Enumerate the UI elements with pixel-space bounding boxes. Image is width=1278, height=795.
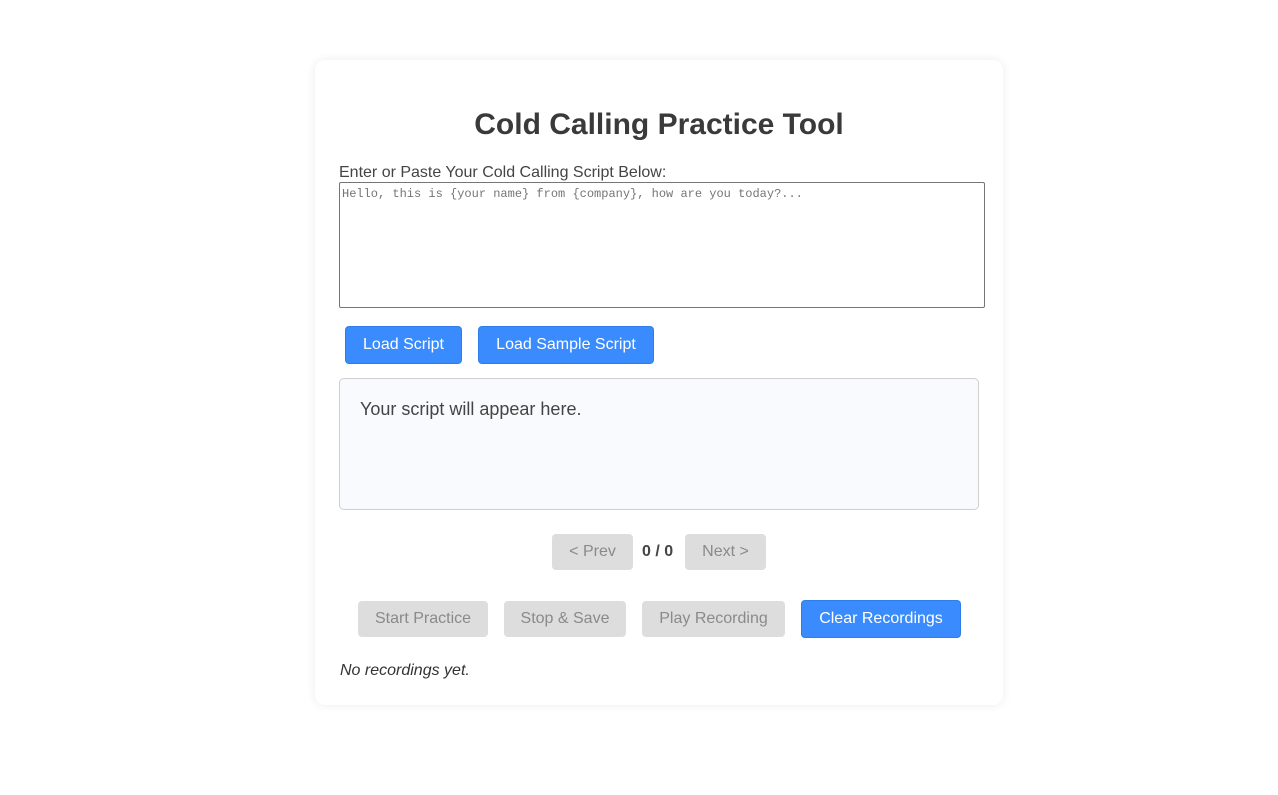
button: start practice: Start Practice xyxy=(375,610,471,627)
label: script input: Enter or Paste Your Cold Calling Script Below: xyxy=(339,164,666,181)
textarea: Hello, this is {your name} from {company}, how are you today?... xyxy=(342,187,803,201)
button: prev xyxy=(552,534,633,570)
button: play recording: Play Recording xyxy=(659,610,768,627)
button: load script: Load Script xyxy=(363,336,444,353)
button: clear recordings xyxy=(801,600,961,638)
button: stop & save xyxy=(504,601,626,637)
script display panel: Your script will appear here. xyxy=(360,399,581,419)
textarea xyxy=(339,182,985,308)
button: next xyxy=(685,534,766,570)
script display panel xyxy=(339,378,979,510)
button: start practice xyxy=(358,601,488,637)
button: play recording xyxy=(642,601,785,637)
panel: main card xyxy=(315,60,1003,705)
button: load script xyxy=(345,326,462,364)
button: stop & save: Stop & Save xyxy=(521,610,609,627)
navigation xyxy=(552,534,766,570)
title: Cold Calling Practice Tool xyxy=(474,108,844,141)
button: load sample script: Load Sample Script xyxy=(496,336,636,353)
button: load sample script xyxy=(478,326,654,364)
button: next: Next > xyxy=(702,543,749,560)
button: clear recordings: Clear Recordings xyxy=(819,610,943,627)
status text: No recordings yet. xyxy=(340,662,470,679)
recording controls xyxy=(358,600,961,638)
counter: 0 / 0 xyxy=(642,543,673,560)
button: prev: < Prev xyxy=(569,543,616,560)
